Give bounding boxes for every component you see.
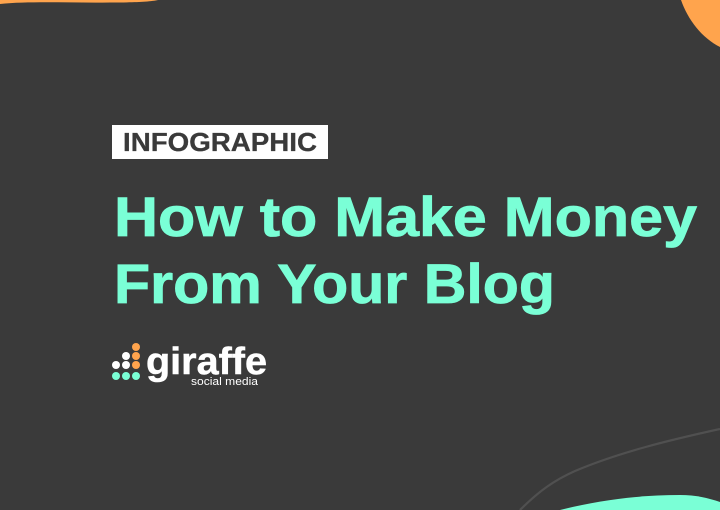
logo wordmark: giraffe (146, 341, 267, 383)
orange shape: top right corner (681, 0, 720, 47)
icon: dots (112, 343, 140, 380)
title: How to Make Money (114, 185, 697, 248)
title (114, 185, 697, 315)
teal shape: bottom right (560, 495, 720, 510)
logo: giraffe social media (112, 341, 267, 388)
orange shape: top left edge (0, 0, 158, 4)
title: From Your Blog (114, 252, 555, 315)
label: infographic: INFOGRAPHIC (123, 127, 317, 157)
logo tagline: social media (191, 376, 259, 388)
thin curve: bottom right (520, 429, 720, 510)
